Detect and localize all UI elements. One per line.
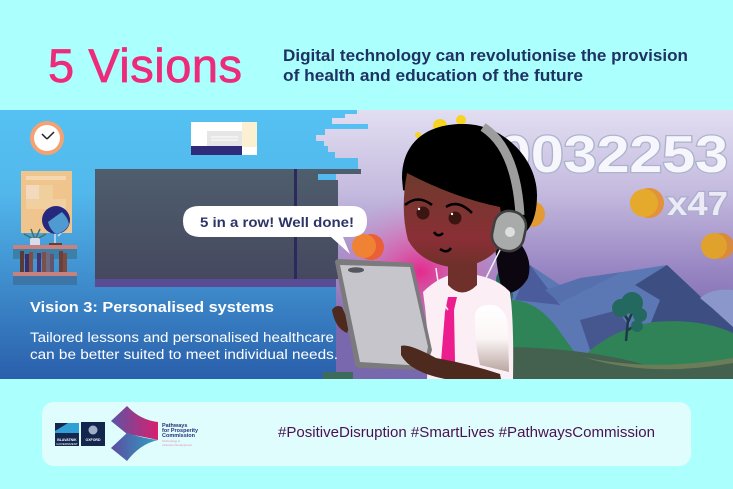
- headset band: [483, 127, 520, 215]
- logo: Blavatnik: BLAVATNIK: [57, 438, 77, 442]
- panel: game world scene: [312, 110, 733, 379]
- poster: [21, 171, 72, 233]
- coin multiplier: x47: [667, 185, 728, 222]
- icon: globe: [42, 206, 70, 245]
- tree behind ponytail: [493, 268, 520, 310]
- subtitle: Digital technology can revolutionise the provision: [283, 47, 688, 65]
- score: 0032253: [498, 126, 728, 184]
- logo: Oxford: OXFORD: [86, 438, 101, 442]
- hashtags: #PositiveDisruption #SmartLives #PathwaysCommission: [278, 424, 655, 441]
- logo: Blavatnik: GOVERNMENT: [56, 442, 78, 446]
- subtitle: of health and education of the future: [283, 67, 583, 85]
- tablet: [335, 259, 432, 370]
- hand behind tablet: [332, 306, 350, 333]
- face: [404, 173, 502, 267]
- speech bubble: 5 in a row! Well done!: [200, 215, 354, 230]
- bookshelf: [13, 245, 77, 285]
- plant: [24, 229, 46, 246]
- tie: [441, 297, 457, 362]
- shirt: [423, 273, 513, 379]
- panel: classroom: [0, 110, 368, 379]
- logo: Pathways wordmark: Pathways: [162, 423, 187, 429]
- mountains: [505, 265, 733, 379]
- hair: [402, 124, 537, 240]
- subtitle: [283, 47, 688, 85]
- coin: orange near tablet: [352, 234, 384, 260]
- pink glow: [325, 194, 515, 350]
- coin multiplier: [630, 185, 728, 222]
- logo: Pathways wordmark: for Prosperity: [162, 428, 199, 434]
- ponytail: [495, 225, 529, 293]
- logo: Pathways wordmark: Technology &: [162, 439, 180, 443]
- headset ear cup: [489, 208, 529, 254]
- neck: [448, 258, 477, 292]
- logo: Oxford: [81, 422, 105, 446]
- vision description: [30, 330, 338, 362]
- hills: [500, 300, 733, 379]
- coin behind head: [519, 201, 545, 227]
- title: 5 Visions: [48, 39, 242, 92]
- character: [323, 124, 537, 379]
- logo: Pathways wordmark: [162, 423, 199, 447]
- vision heading: Vision 3: Personalised systems: [30, 299, 274, 316]
- logo: Blavatnik: [55, 423, 79, 446]
- logo: Pathways mark: [111, 406, 158, 461]
- picture frame: [191, 122, 257, 155]
- vision description: Tailored lessons and personalised healthcare: [30, 330, 334, 345]
- eyebrows, eyes and mouth: [405, 200, 472, 251]
- logo: Pathways wordmark: Commission: [162, 433, 196, 439]
- logo: Pathways wordmark: Inclusive Development: [162, 443, 192, 447]
- coin: [701, 233, 733, 259]
- panel: footer: [42, 402, 691, 466]
- speech bubble: [183, 206, 367, 254]
- sleeve: [475, 305, 509, 372]
- arm: [401, 346, 501, 379]
- green stripes at tablet base: [323, 372, 353, 379]
- blackboard: [95, 169, 361, 287]
- icon: clock: [30, 121, 64, 155]
- stars behind head: [415, 115, 466, 138]
- vision description: can be better suited to meet individual needs.: [30, 347, 338, 362]
- headset wire: [436, 250, 500, 310]
- tree: [612, 292, 647, 341]
